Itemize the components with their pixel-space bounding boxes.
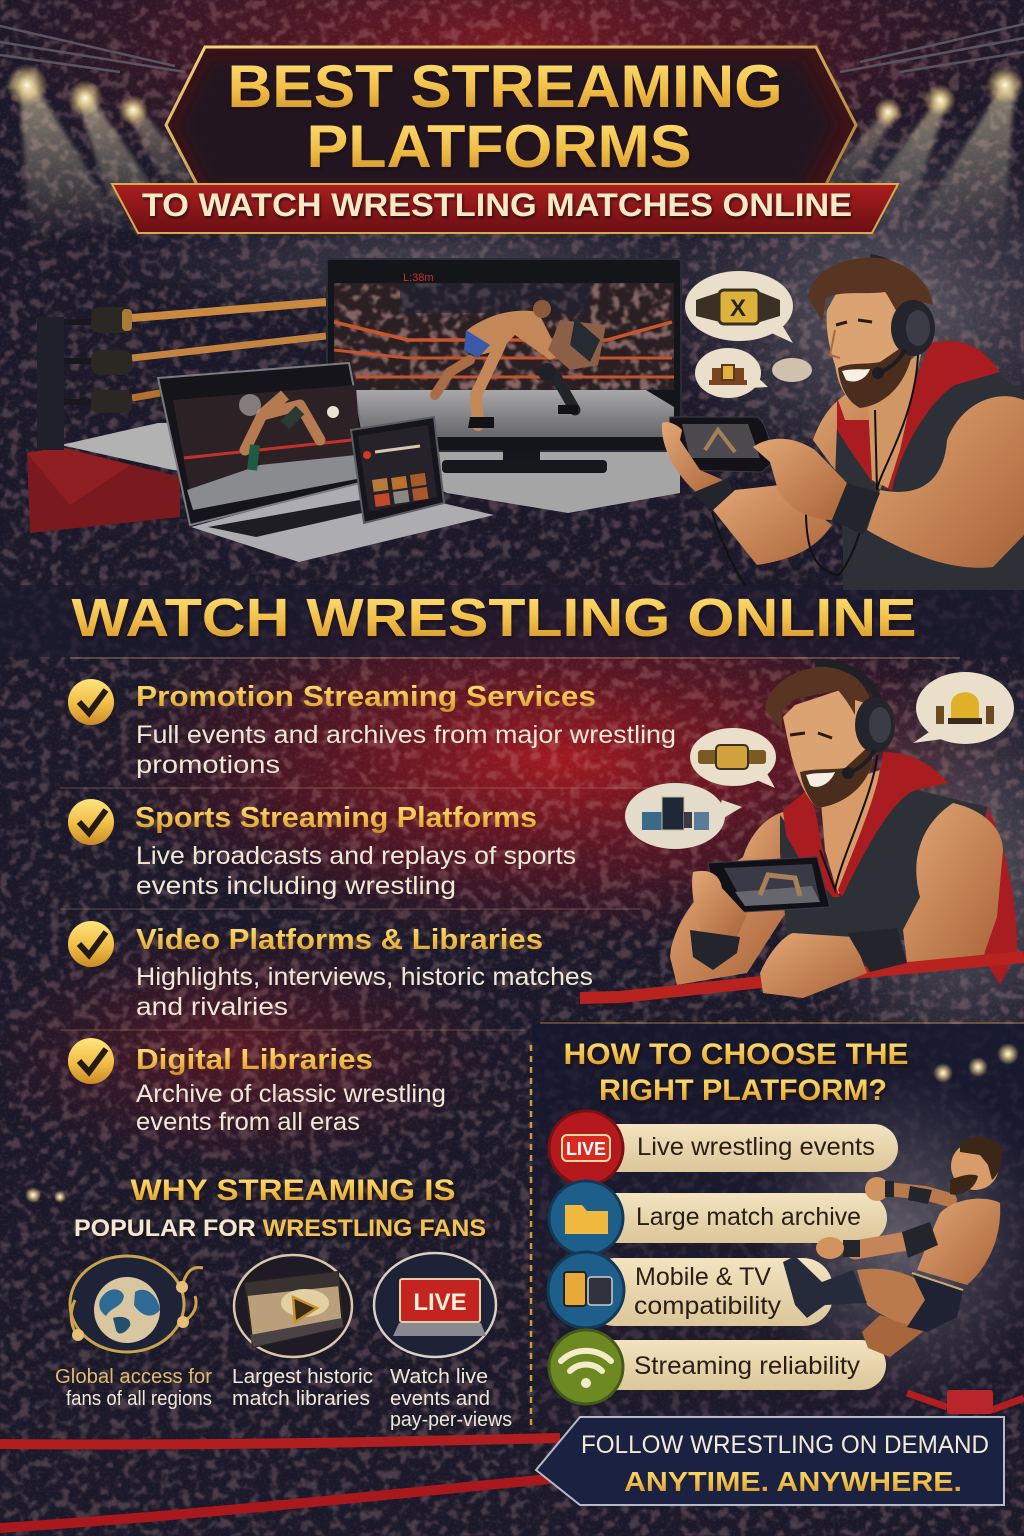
headset	[815, 663, 882, 715]
speech bubble: belt	[690, 728, 776, 788]
back arm	[888, 1189, 950, 1200]
subtitle ribbon: TO WATCH WRESTLING MATCHES ONLINE	[142, 187, 852, 223]
hood	[837, 397, 873, 483]
panel heading: HOW TO CHOOSE THE	[564, 1038, 908, 1071]
item: sports streaming platforms: Sports Streaming Platforms	[135, 802, 537, 834]
hand on phone	[692, 871, 747, 937]
icon: film strip	[234, 1255, 352, 1357]
section heading: POPULAR FOR WRESTLING FANS	[74, 1215, 486, 1242]
item: promotion streaming services: Full events and archives from major wrestling	[136, 721, 676, 749]
speech bubble: devices	[625, 783, 742, 849]
caption: global access	[55, 1366, 212, 1410]
chest	[820, 770, 880, 895]
shorts	[907, 1273, 963, 1332]
vest	[835, 360, 1024, 590]
vest	[780, 790, 987, 940]
shoulder and chest	[813, 370, 915, 500]
caption: watch live	[390, 1366, 512, 1431]
callout: follow wrestling on demand: FOLLOW WRESTLING ON DEMAND	[581, 1431, 989, 1459]
left forearm	[713, 485, 832, 565]
thigh	[857, 1269, 930, 1327]
laptop	[158, 363, 494, 562]
title text: PLATFORMS	[306, 113, 692, 180]
icon: live laptop	[374, 1253, 496, 1357]
stage lights: left	[0, 26, 205, 240]
option: streaming reliability	[549, 1330, 886, 1404]
item: digital libraries	[68, 1038, 446, 1136]
item: sports streaming platforms: Live broadcasts and replays of sports	[136, 842, 576, 870]
back thigh	[862, 1315, 925, 1357]
section heading: watch wrestling online: WATCH WRESTLING ONLINE	[72, 588, 917, 648]
wristbands	[692, 478, 733, 510]
list: streaming types	[60, 679, 676, 1136]
beard	[838, 345, 912, 408]
item: promotion streaming services	[68, 679, 676, 779]
item: sports streaming platforms	[68, 799, 576, 900]
option: live wrestling events: LIVE	[566, 1139, 606, 1159]
hair	[808, 258, 933, 325]
wrestler kicking	[783, 1137, 1002, 1357]
wristband right	[847, 928, 907, 972]
second fan illustration at ropes	[580, 663, 1024, 998]
torso	[917, 1199, 1000, 1285]
option: live wrestling events: Live wrestling events	[637, 1133, 875, 1161]
option: large match archive: Large match archive	[636, 1203, 861, 1231]
option: mobile and tv compatibility: Mobile & TV	[635, 1263, 771, 1291]
caption: global access: Global access for	[55, 1366, 212, 1388]
speech bubble: belt: X	[730, 295, 746, 322]
item: digital libraries: events from all eras	[136, 1108, 360, 1136]
left shoulder	[743, 810, 800, 920]
ring corner with ropes	[27, 302, 330, 533]
caption: global access: fans of all regions	[66, 1388, 212, 1410]
wristband left	[690, 930, 740, 970]
option: streaming reliability: Streaming reliability	[634, 1352, 861, 1380]
boot	[783, 1256, 867, 1318]
subtitle ribbon	[112, 184, 898, 233]
title banner	[112, 47, 898, 233]
headset band behind	[870, 259, 920, 315]
face	[783, 690, 873, 808]
option: large match archive	[549, 1181, 887, 1255]
item: sports streaming platforms: events including wrestling	[136, 872, 456, 900]
option: live wrestling events	[549, 1111, 898, 1185]
stage lights: right	[820, 24, 1024, 235]
item: video platforms and libraries: Highlights, interviews, historic matches	[136, 963, 593, 991]
speech bubble: siren	[913, 672, 1014, 744]
phone	[708, 857, 830, 912]
panel heading: RIGHT PLATFORM?	[599, 1074, 887, 1107]
hair	[765, 667, 872, 730]
cape and hood back	[985, 807, 1017, 985]
section: why streaming is popular	[25, 1174, 512, 1431]
caption: largest libraries: Largest historic	[232, 1366, 373, 1388]
caption: watch live: pay-per-views	[390, 1409, 512, 1431]
wrestlers on screen	[435, 300, 606, 428]
section heading: WHY STREAMING IS	[130, 1174, 456, 1207]
item: video platforms and libraries	[68, 921, 593, 1021]
hand on rope	[760, 933, 867, 998]
title text: BEST STREAMING	[228, 53, 782, 120]
hands	[662, 422, 728, 495]
television	[327, 259, 681, 473]
television: L:38m	[403, 272, 434, 284]
panel: how to choose	[531, 1023, 1024, 1428]
callout: follow wrestling on demand	[536, 1417, 1004, 1505]
hero illustration: ring and devices	[27, 258, 1024, 590]
phone	[669, 417, 773, 472]
rope	[580, 957, 1024, 998]
head	[951, 1142, 999, 1190]
item: digital libraries: Digital Libraries	[136, 1044, 373, 1076]
speech bubble: podium	[695, 348, 812, 398]
icon: globe	[70, 1256, 203, 1352]
mat under television	[360, 400, 680, 513]
speech bubble: belt	[685, 271, 793, 343]
item: digital libraries: Archive of classic wrestling	[136, 1080, 446, 1108]
ring ropes: bottom	[0, 1390, 1024, 1528]
callout: follow wrestling on demand: ANYTIME. ANYWHERE.	[624, 1466, 962, 1497]
option: mobile and tv compatibility	[548, 1252, 833, 1328]
section heading	[74, 1174, 486, 1242]
front arm	[855, 1238, 925, 1250]
item: video platforms and libraries: Video Platforms & Libraries	[136, 924, 543, 956]
caption: watch live: Watch live	[390, 1366, 488, 1388]
item: promotion streaming services: Promotion Streaming Services	[136, 681, 596, 713]
item: promotion streaming services: promotions	[136, 751, 280, 779]
hood	[783, 790, 840, 897]
tablet	[351, 417, 444, 523]
face	[827, 280, 912, 408]
fan with headset and phone	[662, 258, 1024, 590]
caption: watch live: events and	[390, 1388, 490, 1410]
left forearm	[670, 857, 783, 985]
panel heading	[564, 1038, 908, 1107]
icon: live laptop: LIVE	[413, 1289, 467, 1316]
caption: largest libraries: match libraries	[232, 1388, 370, 1410]
headset	[891, 300, 935, 356]
item: video platforms and libraries: and rivalries	[136, 993, 288, 1021]
option: mobile and tv compatibility: compatibility	[634, 1292, 782, 1320]
big arm	[867, 396, 1024, 568]
caption: largest libraries	[232, 1366, 373, 1410]
title text	[228, 53, 782, 180]
